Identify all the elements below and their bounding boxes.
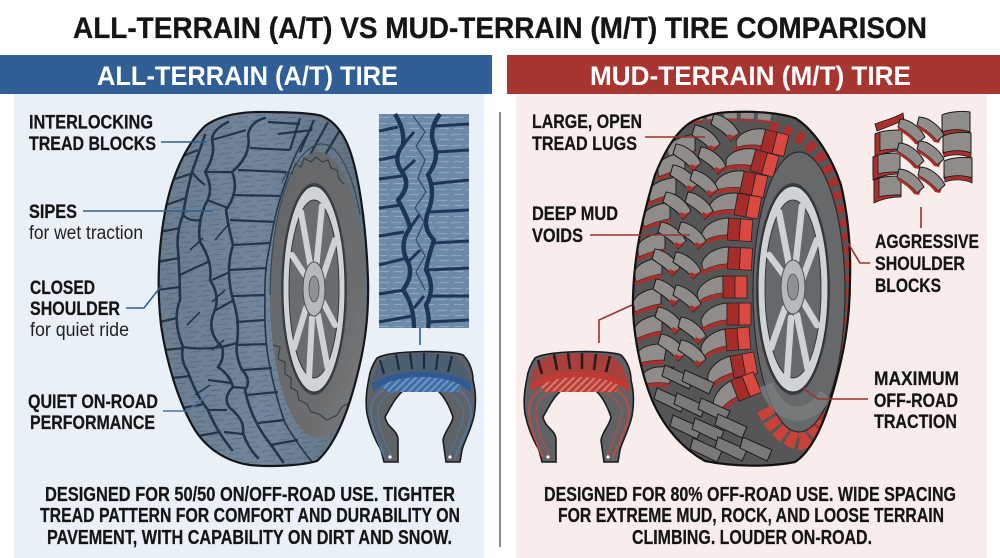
label: deep mud voids: DEEP MUD [532,203,618,225]
label: maximum off-road traction: TRACTION [874,411,957,433]
illustration: all-terrain tire side view [150,105,375,475]
label: aggressive shoulder blocks [848,207,979,297]
label: deep mud voids: VOIDS [532,225,583,247]
leader line: tread strip to cross-section [419,328,421,345]
tread patch swatch [873,111,972,203]
panel header [0,55,492,94]
panel: all-terrain tire [0,55,492,558]
label: interlocking tread blocks: INTERLOCKING [29,112,153,134]
label: quiet on-road performance: QUIET ON-ROAD [28,391,158,413]
label: sipes: SIPES [29,201,77,223]
label: maximum off-road traction: OFF-ROAD [874,390,958,412]
cross-section: all-terrain tire [366,352,475,462]
label: aggressive shoulder blocks: BLOCKS [875,275,941,297]
title: ALL-TERRAIN (A/T) VS MUD-TERRAIN (M/T) TIRE COMPARISON [73,12,927,45]
outer shoulder blocks [770,128,846,440]
panel header [507,55,1000,94]
label: closed shoulder [30,277,162,341]
label: interlocking tread blocks: TREAD BLOCKS [29,133,156,155]
panel header: MUD-TERRAIN (M/T) TIRE [590,61,911,91]
label: large, open tread lugs: TREAD LUGS [532,133,637,155]
panel background [14,94,484,558]
description: all-terrain tire: DESIGNED FOR 50/50 ON/OFF-ROAD USE. TIGHTER [45,484,455,506]
wheel rim [756,183,830,395]
panel header: ALL-TERRAIN (A/T) TIRE [97,61,398,91]
label: large, open tread lugs [532,111,705,155]
label: deep mud voids [532,203,690,247]
description: all-terrain tire: PAVEMENT, WITH CAPABILITY ON DIRT AND SNOW. [47,527,452,549]
label: maximum off-road traction [803,368,959,433]
sidewall [753,152,845,432]
label: sipes [29,201,213,244]
leader line: tire to cross-section [599,305,632,343]
tread strip swatch [379,114,469,328]
label: closed shoulder: CLOSED [30,277,95,299]
label: closed shoulder: SHOULDER [30,298,120,320]
cross-section: mud-terrain tire [524,352,633,462]
description: mud-terrain tire: CLIMBING. LOUDER ON-ROAD. [632,527,872,549]
panel: mud-terrain tire [507,55,1000,558]
sidewall [270,152,366,438]
description: all-terrain tire [40,484,460,549]
description: mud-terrain tire [544,484,956,549]
label: aggressive shoulder blocks: SHOULDER [875,253,965,275]
label: quiet on-road performance: PERFORMANCE [30,412,155,434]
label: closed shoulder: for quiet ride [30,320,129,341]
label: maximum off-road traction: MAXIMUM [874,368,959,390]
label: large, open tread lugs: LARGE, OPEN [532,111,642,133]
label: interlocking tread blocks [29,112,207,155]
description: all-terrain tire: TREAD PATTERN FOR COMFORT AND DURABILITY ON [40,505,460,527]
illustration: mud-terrain tire side view [625,105,860,475]
label: sipes: for wet traction [29,223,143,244]
panel background [516,94,987,558]
wheel rim [281,183,347,395]
label: quiet on-road performance [28,391,209,434]
